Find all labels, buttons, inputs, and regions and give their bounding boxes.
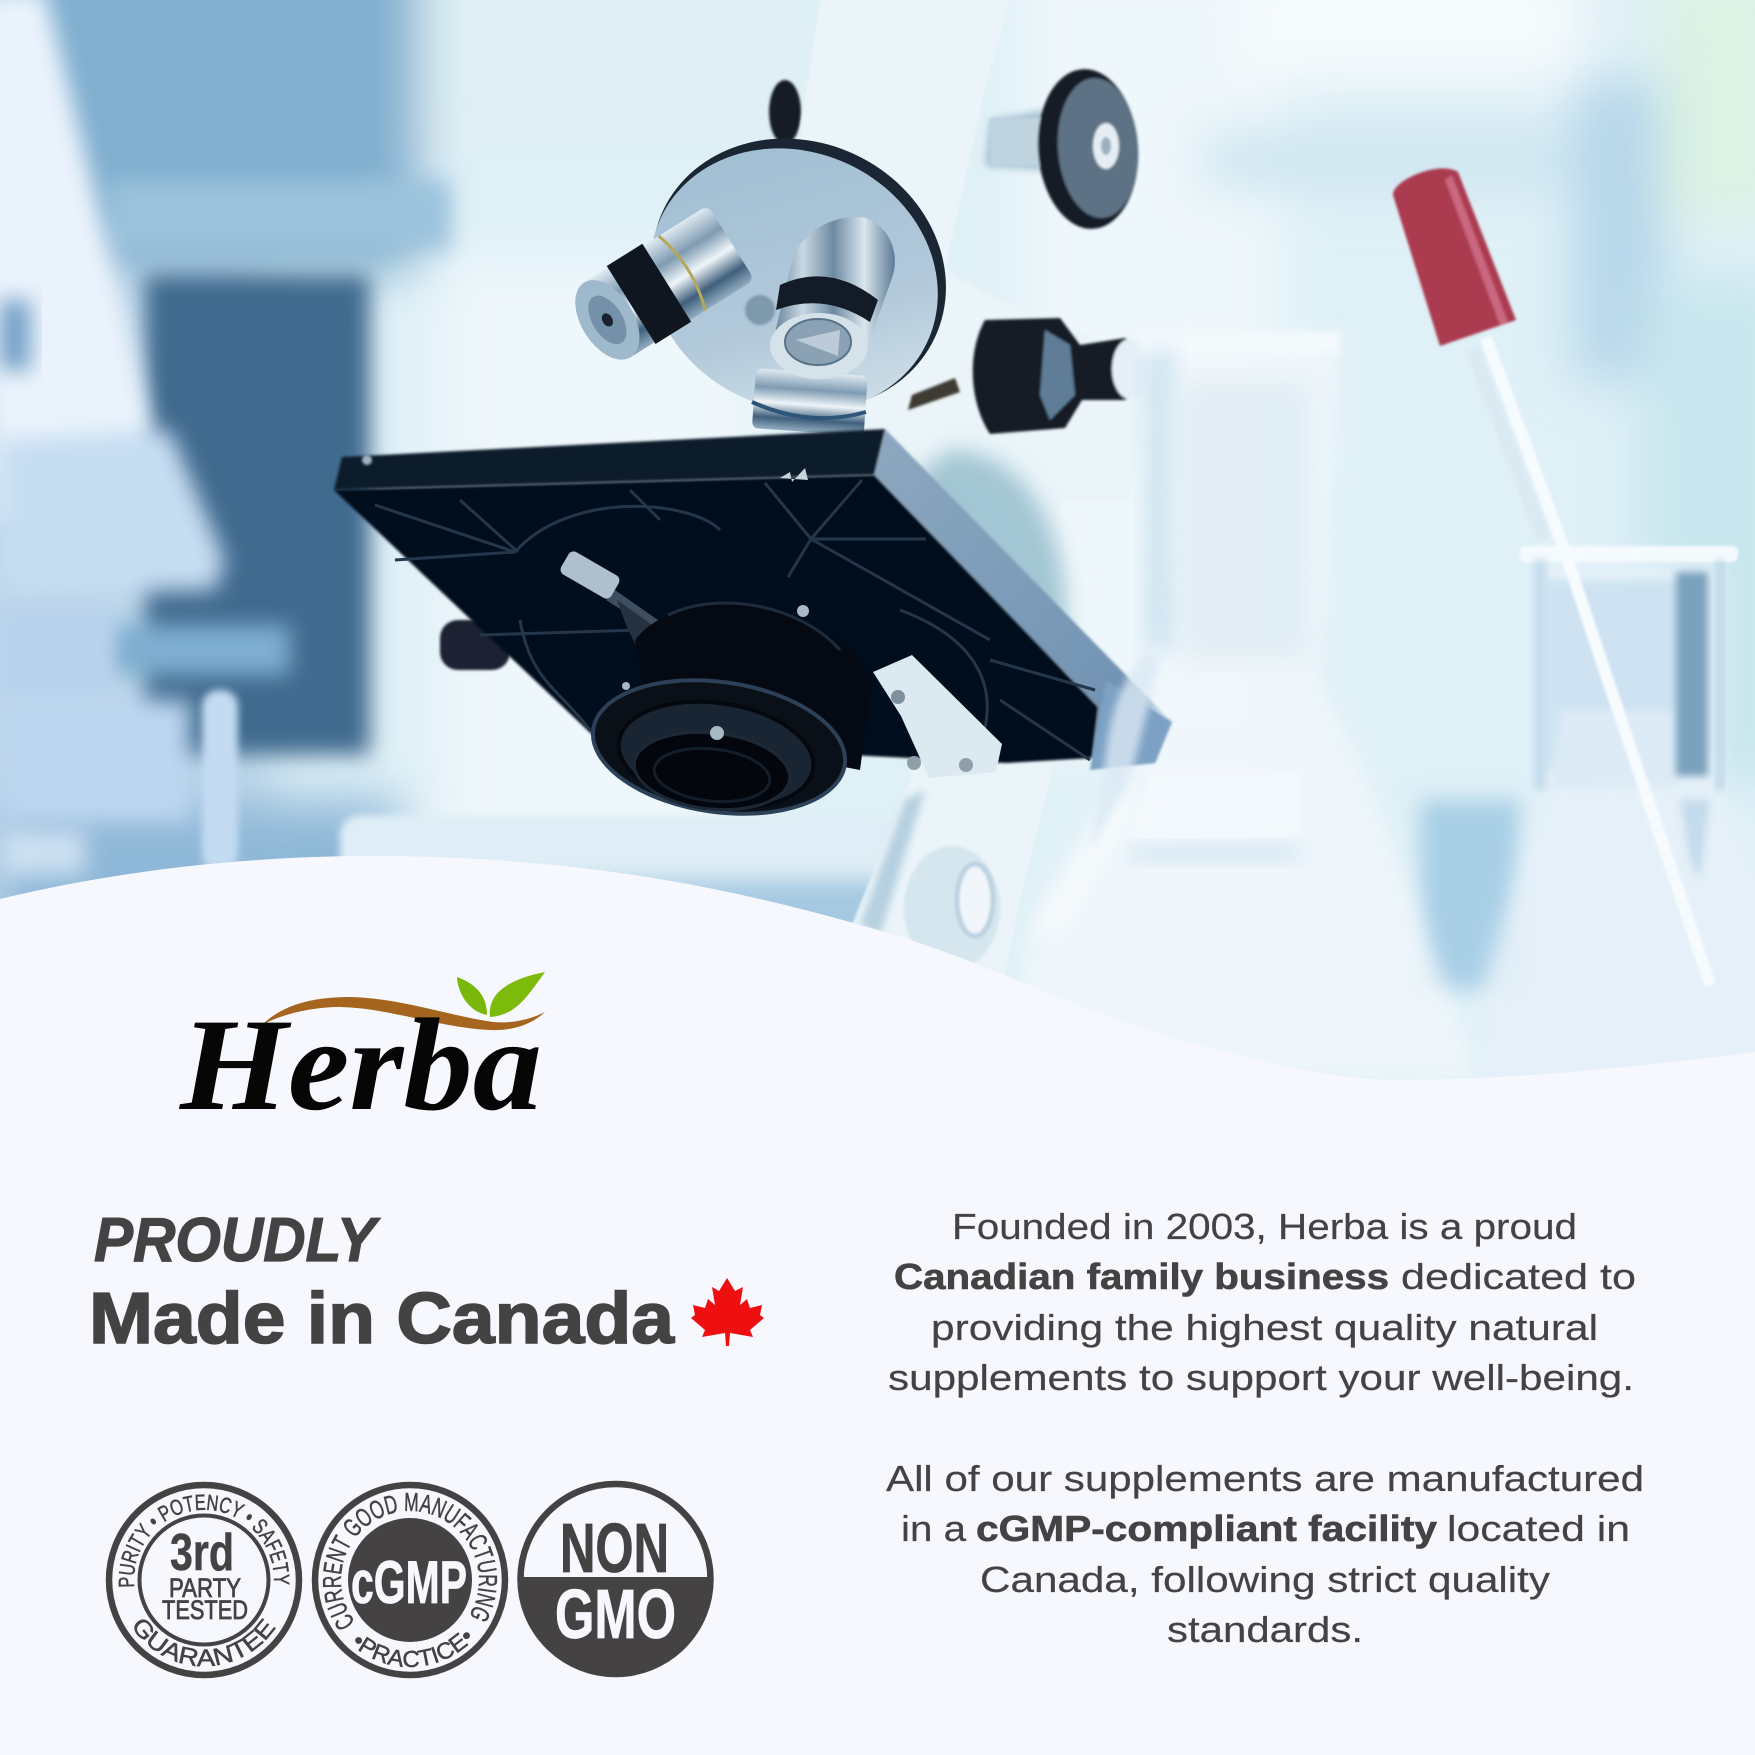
- photo backdrop: [0, 0, 1755, 1100]
- stage top edge: [334, 429, 885, 490]
- badge: 3rd party tested: PARTY: [169, 1573, 241, 1603]
- text block: about Herba: Canadian family business: [894, 1256, 1389, 1297]
- logo left leaf: [457, 977, 487, 1015]
- badge: Non-GMO: NON: [560, 1509, 669, 1587]
- heading: Proudly: PROUDLY: [94, 1206, 381, 1275]
- text block: manufacturing: All of our supplements are manufactured: [886, 1458, 1644, 1499]
- stage side: [874, 429, 1172, 763]
- heading: Made in Canada: Made in Canada: [89, 1279, 675, 1359]
- logo wordmark: Herba: [179, 991, 542, 1138]
- microscope stage: [334, 429, 1172, 763]
- badge: 3rd party tested: [106, 1482, 302, 1678]
- blurred stand: [110, 625, 290, 675]
- text block: manufacturing: standards.: [1167, 1609, 1363, 1650]
- stage corner chip: [362, 455, 372, 465]
- badge: cGMP: CURRENT GOOD MANUFACTURING: [322, 1492, 498, 1630]
- panel: laboratory photo: [0, 0, 1755, 1100]
- lens mount: [584, 603, 872, 829]
- text block: manufacturing: cGMP-compliant facility: [976, 1508, 1437, 1549]
- stage ribs: [375, 480, 1095, 760]
- badge: cGMP: cGMP: [351, 1549, 467, 1616]
- objective left: [561, 204, 756, 373]
- badge: 3rd party tested: 3rd: [170, 1524, 234, 1582]
- text block: about Herba: supplements to support your well-being.: [888, 1357, 1634, 1398]
- blurred white arm left: [0, 0, 150, 540]
- nosepiece disc: [607, 91, 991, 458]
- stage rear knob: [440, 620, 510, 670]
- objective neck: [752, 368, 960, 436]
- center flask: [1000, 332, 1481, 1080]
- blurred lab background: [0, 0, 1755, 950]
- badge: Non-GMO: [518, 1484, 714, 1675]
- objective right: [770, 217, 895, 379]
- badge: 3rd party tested: TESTED: [162, 1595, 248, 1625]
- top focus knob: [990, 66, 1143, 232]
- badge: cGMP: •PRACTICE•: [355, 1632, 470, 1668]
- text block: manufacturing: in a: [901, 1508, 967, 1549]
- text block: about Herba: providing the highest quality natural: [931, 1307, 1598, 1348]
- logo swoosh: [262, 997, 545, 1030]
- text block: manufacturing: located in: [1447, 1508, 1630, 1549]
- middle focus knob: [973, 318, 1148, 434]
- badge: 3rd party tested: GUARANTEE: [134, 1618, 276, 1666]
- icon: maple leaf: [691, 1278, 764, 1346]
- text block: about Herba: Founded in 2003, Herba is a proud: [952, 1206, 1577, 1247]
- white bracket: [873, 655, 1002, 778]
- pipette red bulb: [1393, 168, 1516, 346]
- pipette tube: [1472, 338, 1710, 985]
- logo right leaf: [490, 972, 545, 1017]
- text block: manufacturing: Canada, following strict quality: [980, 1559, 1550, 1600]
- text block: manufacturing: [886, 1458, 1644, 1650]
- badge: Non-GMO: GMO: [555, 1575, 676, 1653]
- thumb screw: [558, 549, 665, 650]
- text block: about Herba: [888, 1206, 1636, 1398]
- blue band between flasks: [1420, 800, 1520, 990]
- shelf band: [110, 180, 450, 250]
- logo: Herba: [179, 972, 545, 1138]
- lower roller: [904, 846, 1000, 970]
- lower body shadow: [910, 450, 1065, 702]
- stage underside: [334, 475, 1098, 763]
- badge: 3rd party tested: PURITY • POTENCY • SAFETY: [118, 1494, 290, 1587]
- microscope arm: [760, 0, 1150, 1000]
- panel: white wave background: [0, 856, 1755, 1755]
- right flask: [1481, 546, 1755, 1100]
- text block: about Herba: dedicated to: [1401, 1256, 1636, 1297]
- dark cabinet: [145, 275, 370, 755]
- flask edge over stage: [1090, 680, 1172, 770]
- white table: [340, 815, 900, 885]
- small nose screw: [745, 295, 775, 325]
- blurred left base: [0, 430, 225, 595]
